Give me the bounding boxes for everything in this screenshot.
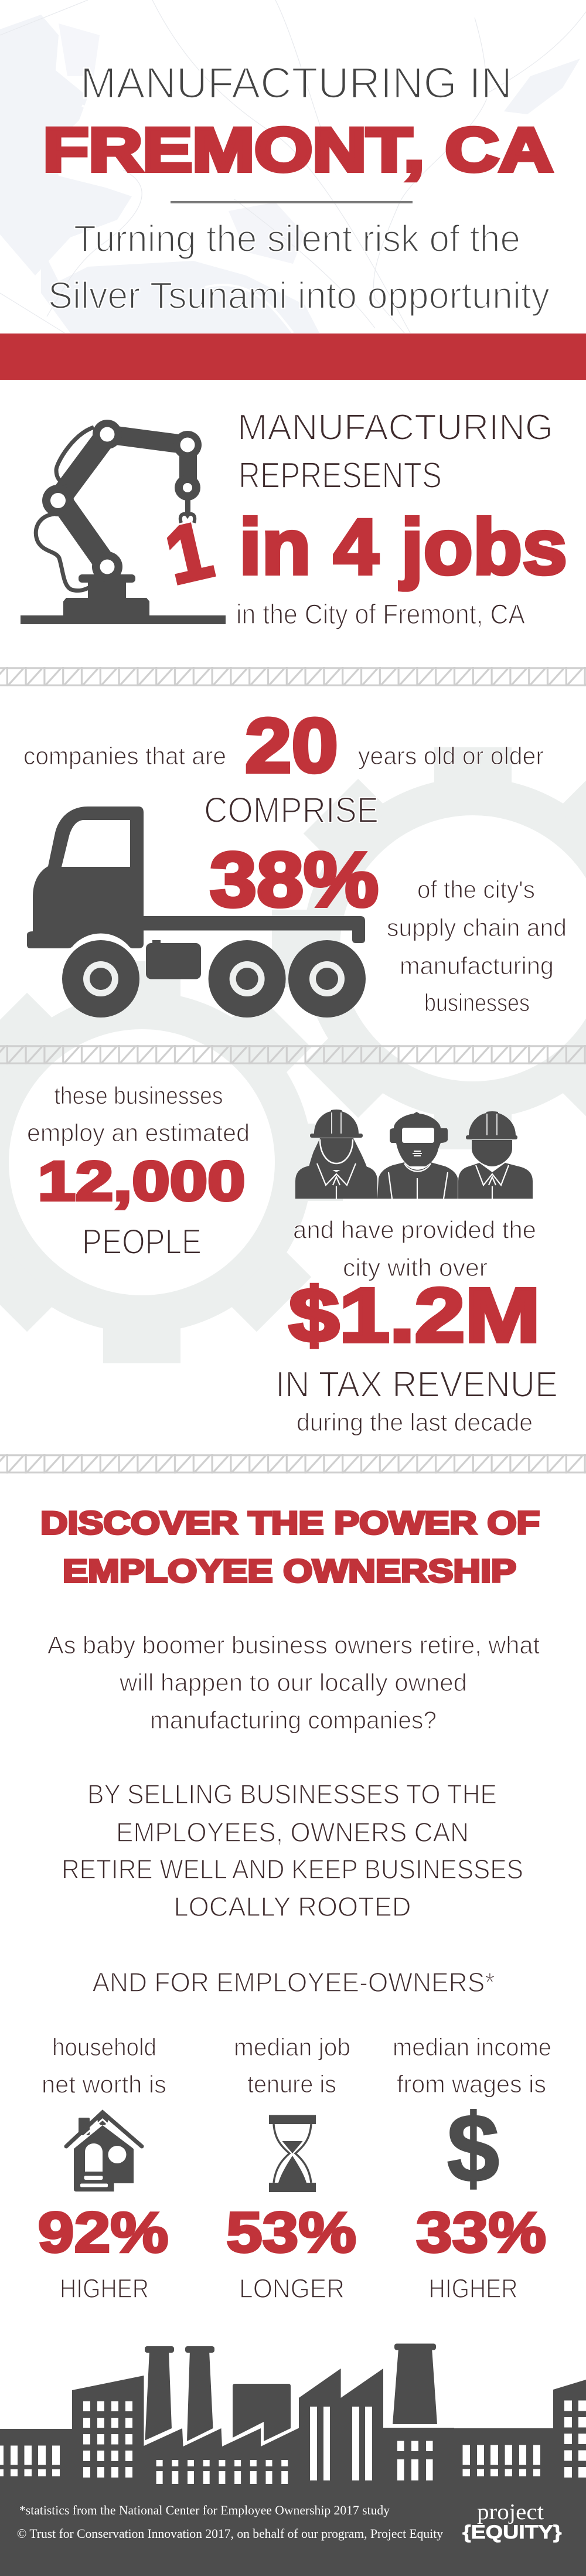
panel: net worth stat (38, 2033, 169, 2303)
worker with welding mask (377, 1112, 458, 1199)
text: by selling businesses: LOCALLY ROOTED (173, 1891, 411, 1922)
panel: 20 year old companies (23, 702, 567, 1018)
worker with hard hat (458, 1111, 533, 1199)
text: question: will happen to our locally owned (119, 1669, 467, 1696)
text: of the city's supply chain and manufacturing businesses: businesses (424, 989, 530, 1016)
text: median income from wages is: median income (393, 2033, 551, 2061)
text: median income from wages is (393, 2033, 551, 2098)
stat: 20: 20 (245, 702, 338, 788)
text: of the city's supply chain and manufacturing businesses: manufacturing (400, 952, 554, 979)
icon: robot arm (21, 420, 226, 624)
panel: job tenure stat (226, 2033, 356, 2303)
text: of the city's supply chain and manufacturing businesses: of the city's (417, 876, 535, 903)
text: by selling businesses: RETIRE WELL AND KEEP BUSINESSES (62, 1854, 523, 1884)
text: median job tenure is (234, 2033, 350, 2098)
text: comprise: COMPRISE (204, 790, 379, 830)
text: higher: HIGHER (60, 2274, 149, 2303)
logo: project equity: project (477, 2500, 544, 2524)
text: question (47, 1631, 540, 1734)
stat: 1 in 4 jobs: 1 (158, 505, 220, 601)
worker with long hair (295, 1110, 377, 1199)
text: people: PEOPLE (82, 1222, 202, 1261)
icon: house (66, 2112, 142, 2192)
text: and have provided the city with over (293, 1216, 536, 1281)
icon: workers (295, 1110, 533, 1199)
text: by selling businesses: BY SELLING BUSINESSES TO THE (87, 1779, 497, 1809)
text: these businesses employ an estimated (27, 1082, 250, 1146)
stat: 53 percent: 53% (226, 2200, 356, 2264)
text: of the city's supply chain and manufacturing businesses (387, 876, 567, 1016)
text: these businesses employ an estimated: employ an estimated (27, 1119, 250, 1146)
panel: one in four jobs (21, 407, 567, 629)
stat: 92 percent: 92% (38, 2200, 169, 2264)
icon: dollar sign: $ (447, 2094, 499, 2202)
stat: 1.2 million dollars: $1.2M (289, 1272, 540, 1358)
caption: in the City of Fremont: in the City of Fremont, CA (236, 598, 526, 629)
gear: left (0, 961, 343, 1363)
panel: factory footer (0, 2343, 586, 2576)
text: during the last decade: during the last decade (297, 1408, 533, 1436)
panel: employment and tax revenue (27, 1082, 558, 1436)
text: these businesses employ an estimated: these businesses (54, 1082, 223, 1109)
panel: background gears (0, 747, 586, 1363)
text: median income from wages is: from wages is (397, 2070, 546, 2098)
footnote: copyright: © Trust for Conservation Innovation 2017, on behalf of our program, Project Equity (17, 2526, 443, 2541)
icon: hourglass (269, 2115, 316, 2192)
panel: employee ownership (40, 1505, 540, 1997)
text: by selling businesses (62, 1779, 523, 1922)
text: question: manufacturing companies? (150, 1706, 437, 1734)
text: companies that are: companies that are (23, 742, 226, 770)
heading: discover the power of employee ownership (40, 1505, 540, 1589)
text: years old or older: years old or older (358, 742, 544, 770)
subtitle line 1: Turning the silent risk of the (74, 217, 520, 260)
heading: discover the power of employee ownership: EMPLOYEE OWNERSHIP (63, 1553, 516, 1589)
text: by selling businesses: EMPLOYEES, OWNERS CAN (116, 1817, 469, 1847)
gear: right (272, 747, 586, 1149)
panel: income stat (393, 2033, 551, 2303)
text: in tax revenue: IN TAX REVENUE (275, 1364, 558, 1405)
title rule (171, 201, 413, 203)
text: question: As baby boomer business owners retire, what (47, 1631, 540, 1659)
logo: project equity (462, 2500, 561, 2543)
stat: 38 percent: 38% (210, 836, 379, 923)
subtitle line 2: Silver Tsunami into opportunity (48, 274, 550, 317)
heading: manufacturing represents (237, 407, 553, 496)
heading: discover the power of employee ownership: DISCOVER THE POWER OF (40, 1505, 540, 1541)
text: household net worth is: net worth is (42, 2070, 166, 2098)
logo: project equity: {EQUITY} (462, 2521, 561, 2543)
text: household net worth is: household (52, 2033, 156, 2061)
heading: manufacturing represents: REPRESENTS (239, 455, 442, 496)
stat: 1 in 4 jobs (158, 503, 567, 601)
text: of the city's supply chain and manufacturing businesses: supply chain and (387, 914, 567, 941)
panel: header (0, 0, 586, 380)
heading: manufacturing represents: MANUFACTURING (237, 407, 553, 448)
illustration: factory skyline (0, 2343, 586, 2576)
text: and for employee-owners: AND FOR EMPLOYEE-OWNERS* (93, 1967, 495, 1997)
text: household net worth is (42, 2033, 166, 2098)
text: and have provided the city with over: city with over (343, 1254, 488, 1281)
footnote: statistics source: *statistics from the National Center for Employee Ownership 2017 study (19, 2503, 390, 2517)
red band (0, 334, 586, 380)
icon: truck (27, 807, 366, 1018)
stat: 1 in 4 jobs: in 4 jobs (239, 503, 567, 591)
text: median job tenure is: tenure is (247, 2070, 336, 2098)
text: higher: HIGHER (429, 2274, 518, 2303)
map background (0, 0, 586, 333)
title line: manufacturing in: MANUFACTURING IN (80, 59, 512, 107)
text: median job tenure is: median job (234, 2033, 350, 2061)
stat: 33 percent: 33% (416, 2200, 546, 2264)
stat: 12,000: 12,000 (38, 1150, 245, 1212)
text: and have provided the city with over: and have provided the (293, 1216, 536, 1244)
text: longer: LONGER (239, 2274, 345, 2303)
title: Fremont, CA: FREMONT, CA (43, 116, 553, 184)
